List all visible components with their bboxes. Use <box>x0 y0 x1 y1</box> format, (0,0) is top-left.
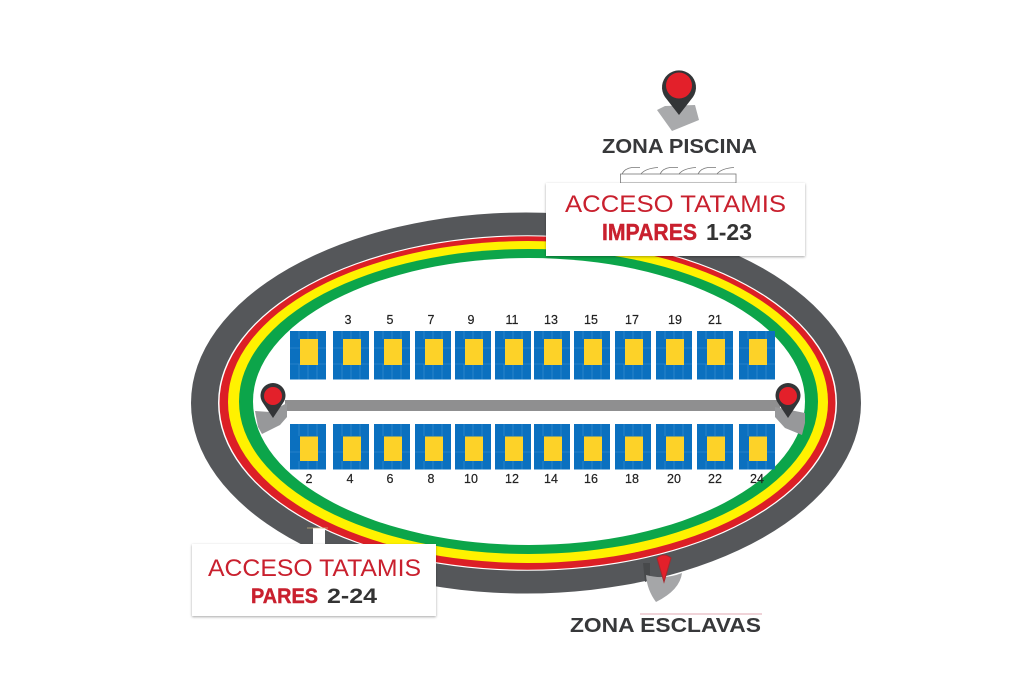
odd tatami numbers: 17 <box>625 313 639 327</box>
even tatami numbers <box>306 472 764 486</box>
even tatami numbers: 16 <box>584 472 598 486</box>
odd tatami numbers: 7 <box>428 313 435 327</box>
even tatami numbers: 2 <box>306 472 313 486</box>
heading: zona piscina: ZONA PISCINA <box>602 135 757 158</box>
even tatami numbers: 18 <box>625 472 639 486</box>
even tatami numbers: 24 <box>750 472 764 486</box>
central walkway <box>285 400 780 411</box>
even tatami numbers: 20 <box>667 472 681 486</box>
panel title: acceso tatamis impares: ACCESO TATAMIS <box>565 191 786 218</box>
odd tatami numbers: 3 <box>345 313 352 327</box>
access tab <box>307 528 328 546</box>
odd tatami numbers <box>345 313 722 327</box>
odd tatami numbers: 13 <box>544 313 558 327</box>
even tatami numbers: 14 <box>544 472 558 486</box>
even tatami numbers: 10 <box>464 472 478 486</box>
heading: zona esclavas: ZONA ESCLAVAS <box>570 614 761 637</box>
icon: pool zone pin <box>657 70 699 131</box>
label: impares: IMPARES <box>602 219 697 245</box>
odd tatami numbers: 21 <box>708 313 722 327</box>
odd tatami numbers: 19 <box>668 313 682 327</box>
icon: esclavas zone pin <box>643 555 682 602</box>
even tatami numbers: 22 <box>708 472 722 486</box>
even tatami numbers: 6 <box>387 472 394 486</box>
odd tatami numbers: 15 <box>584 313 598 327</box>
icon: right pin <box>775 383 805 435</box>
icon: pool seating <box>620 168 736 183</box>
top row of tatamis <box>290 331 775 380</box>
even tatami numbers: 12 <box>505 472 519 486</box>
icon: left pin <box>255 383 287 434</box>
even tatami numbers: 8 <box>428 472 435 486</box>
range: 1-23: 1-23 <box>706 219 752 245</box>
range: 2-24: 2-24 <box>327 585 377 608</box>
odd tatami numbers: 9 <box>468 313 475 327</box>
odd tatami numbers: 11 <box>506 313 519 327</box>
odd tatami numbers: 5 <box>387 313 394 327</box>
panel title: acceso tatamis pares: ACCESO TATAMIS <box>208 555 421 582</box>
even tatami numbers: 4 <box>347 472 354 486</box>
panel: acceso impares <box>546 183 805 256</box>
oval track <box>191 212 861 594</box>
panel: acceso pares <box>192 544 436 616</box>
bottom row of tatamis <box>290 424 775 470</box>
label: pares: PARES <box>251 585 318 608</box>
